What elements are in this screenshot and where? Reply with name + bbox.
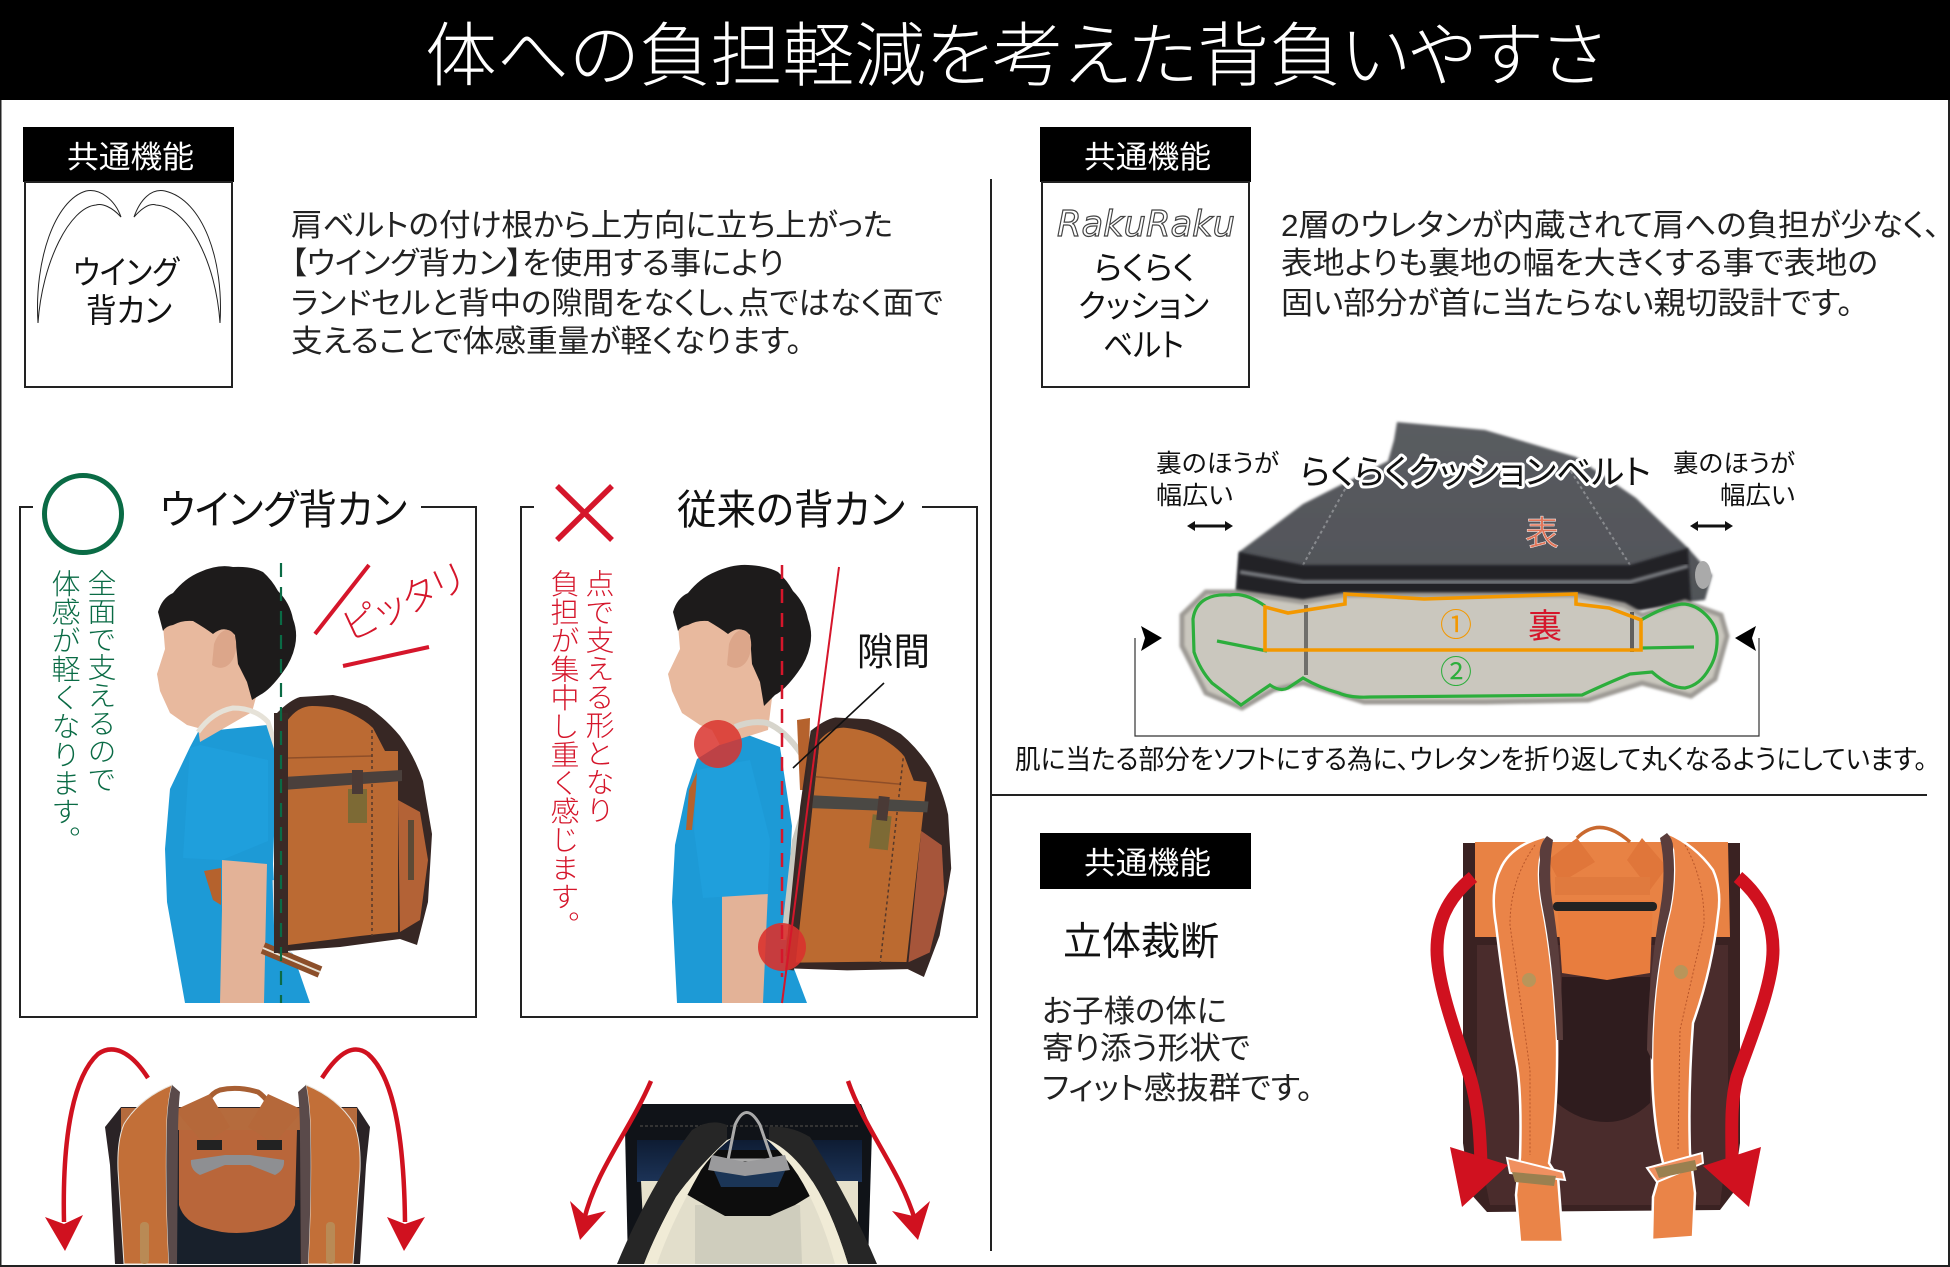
title banner: 体への負担軽減を考えた背負いやすさ bbox=[425, 17, 1605, 95]
callout: pittari: ピッタリ bbox=[336, 557, 472, 650]
heading: ウイング背カン bbox=[160, 487, 407, 533]
text block: wing description: ランドセルと背中の隙間をなくし、点ではなく面で bbox=[291, 286, 943, 321]
heading: 3D cut: 立体裁断 bbox=[1063, 921, 1219, 964]
vertical note: 全面で支えるので bbox=[83, 569, 116, 793]
panel: conventional back harness side view bbox=[521, 486, 977, 1017]
diagram: cushion belt cross section: 裏 bbox=[1528, 608, 1562, 646]
note left: 幅広い bbox=[1156, 482, 1233, 510]
diagram: cushion belt cross section bbox=[1015, 422, 1927, 775]
note right: 幅広い bbox=[1720, 482, 1795, 510]
text block: wing description: 肩ベルトの付け根から上方向に立ち上がった bbox=[291, 208, 893, 243]
note left: 裏のほうが bbox=[1156, 450, 1279, 478]
vertical note bbox=[546, 569, 614, 939]
note left bbox=[1156, 450, 1279, 510]
diagram: cushion belt cross section: 表 bbox=[1525, 515, 1559, 553]
text block: 3D cut description: フィット感抜群です。 bbox=[1042, 1071, 1313, 1106]
text block: belt description bbox=[1281, 208, 1940, 321]
tag: common feature bbox=[1040, 127, 1251, 182]
panel: wing back harness side view bbox=[20, 476, 476, 1017]
labels: ① bbox=[1440, 607, 1472, 643]
arrows bbox=[45, 1049, 425, 1251]
label: ベルト bbox=[1103, 327, 1184, 363]
text block: wing description: 【ウイング背カン】を使用する事により bbox=[291, 246, 784, 281]
photo: boy with bag bbox=[668, 565, 967, 1003]
wing label bbox=[73, 254, 180, 329]
label: らくらく bbox=[1094, 250, 1195, 286]
tag: common feature: 共通機能 bbox=[1084, 140, 1211, 175]
wing label: 背カン bbox=[86, 292, 172, 329]
photo: bag back with shoulder straps bbox=[1437, 827, 1773, 1242]
text block: belt description: 表地よりも裏地の幅を大きくする事で表地の bbox=[1281, 246, 1878, 281]
tag: common feature bbox=[23, 127, 234, 182]
text block: 3D cut description: 寄り添う形状で bbox=[1042, 1031, 1250, 1066]
vertical note: 点で支える形となり bbox=[581, 569, 614, 824]
caption: 肌に当たる部分をソフトにする為に、ウレタンを折り返して丸くなるようにしています。 bbox=[1015, 745, 1927, 775]
vertical note: 体感が軽くなります。 bbox=[47, 569, 80, 854]
label: クッション bbox=[1078, 288, 1209, 324]
text block: 3D cut description bbox=[1042, 994, 1313, 1106]
icon: green circle bbox=[44, 476, 122, 552]
line: second layer bbox=[1193, 594, 1717, 705]
tag: common feature: 共通機能 bbox=[1084, 846, 1211, 881]
arrow: width right bbox=[1690, 521, 1733, 531]
text block: belt description: 2層のウレタンが内蔵されて肩への負担が少なく、 bbox=[1281, 208, 1940, 243]
diagram: cushion belt cross section: ② bbox=[1440, 654, 1472, 690]
note right bbox=[1673, 450, 1795, 510]
panel: rakuraku cushion belt tag bbox=[1040, 127, 1251, 387]
label bbox=[1078, 250, 1209, 363]
diagram title: らくらくクッションベルト bbox=[1300, 454, 1651, 492]
bag bbox=[274, 695, 432, 953]
text block: wing description bbox=[291, 208, 943, 359]
icon: red cross bbox=[557, 486, 612, 540]
bag bbox=[782, 713, 967, 987]
arrows bbox=[1437, 877, 1773, 1207]
text block: 3D cut description: お子様の体に bbox=[1042, 994, 1227, 1029]
tag: common feature bbox=[1040, 833, 1251, 889]
callout: gap: 隙間 bbox=[857, 632, 930, 674]
arrow: width left bbox=[1187, 521, 1233, 531]
bracket bbox=[1135, 626, 1759, 736]
vertical note: 負担が集中し重く感じます。 bbox=[546, 569, 580, 939]
line: first layer bbox=[1265, 594, 1641, 650]
note right: 裏のほうが bbox=[1673, 450, 1795, 478]
title banner bbox=[0, 0, 1950, 100]
arrows bbox=[570, 1081, 930, 1240]
line: back alignment bbox=[280, 563, 282, 1003]
photo: wing harness bag back with arrows bbox=[45, 1049, 425, 1264]
photo: conventional harness bag back with arrows bbox=[570, 1081, 930, 1264]
marks: pressure points bbox=[694, 720, 742, 768]
heading: 従来の背カン bbox=[677, 487, 905, 533]
icon: wing shape bbox=[38, 191, 220, 323]
callout: gap bbox=[793, 632, 930, 768]
tag: common feature: 共通機能 bbox=[67, 140, 194, 175]
photo: boy with bag bbox=[157, 563, 432, 1003]
logo: RakuRaku bbox=[1057, 204, 1235, 245]
panel: wing icon tag bbox=[23, 127, 234, 387]
vertical note bbox=[47, 569, 116, 854]
text block: belt description: 固い部分が首に当たらない親切設計です。 bbox=[1281, 286, 1853, 321]
lines: back alignment bbox=[781, 565, 783, 977]
wing label: ウイング bbox=[73, 254, 180, 291]
text block: wing description: 支えることで体感重量が軽くなります。 bbox=[291, 324, 802, 359]
